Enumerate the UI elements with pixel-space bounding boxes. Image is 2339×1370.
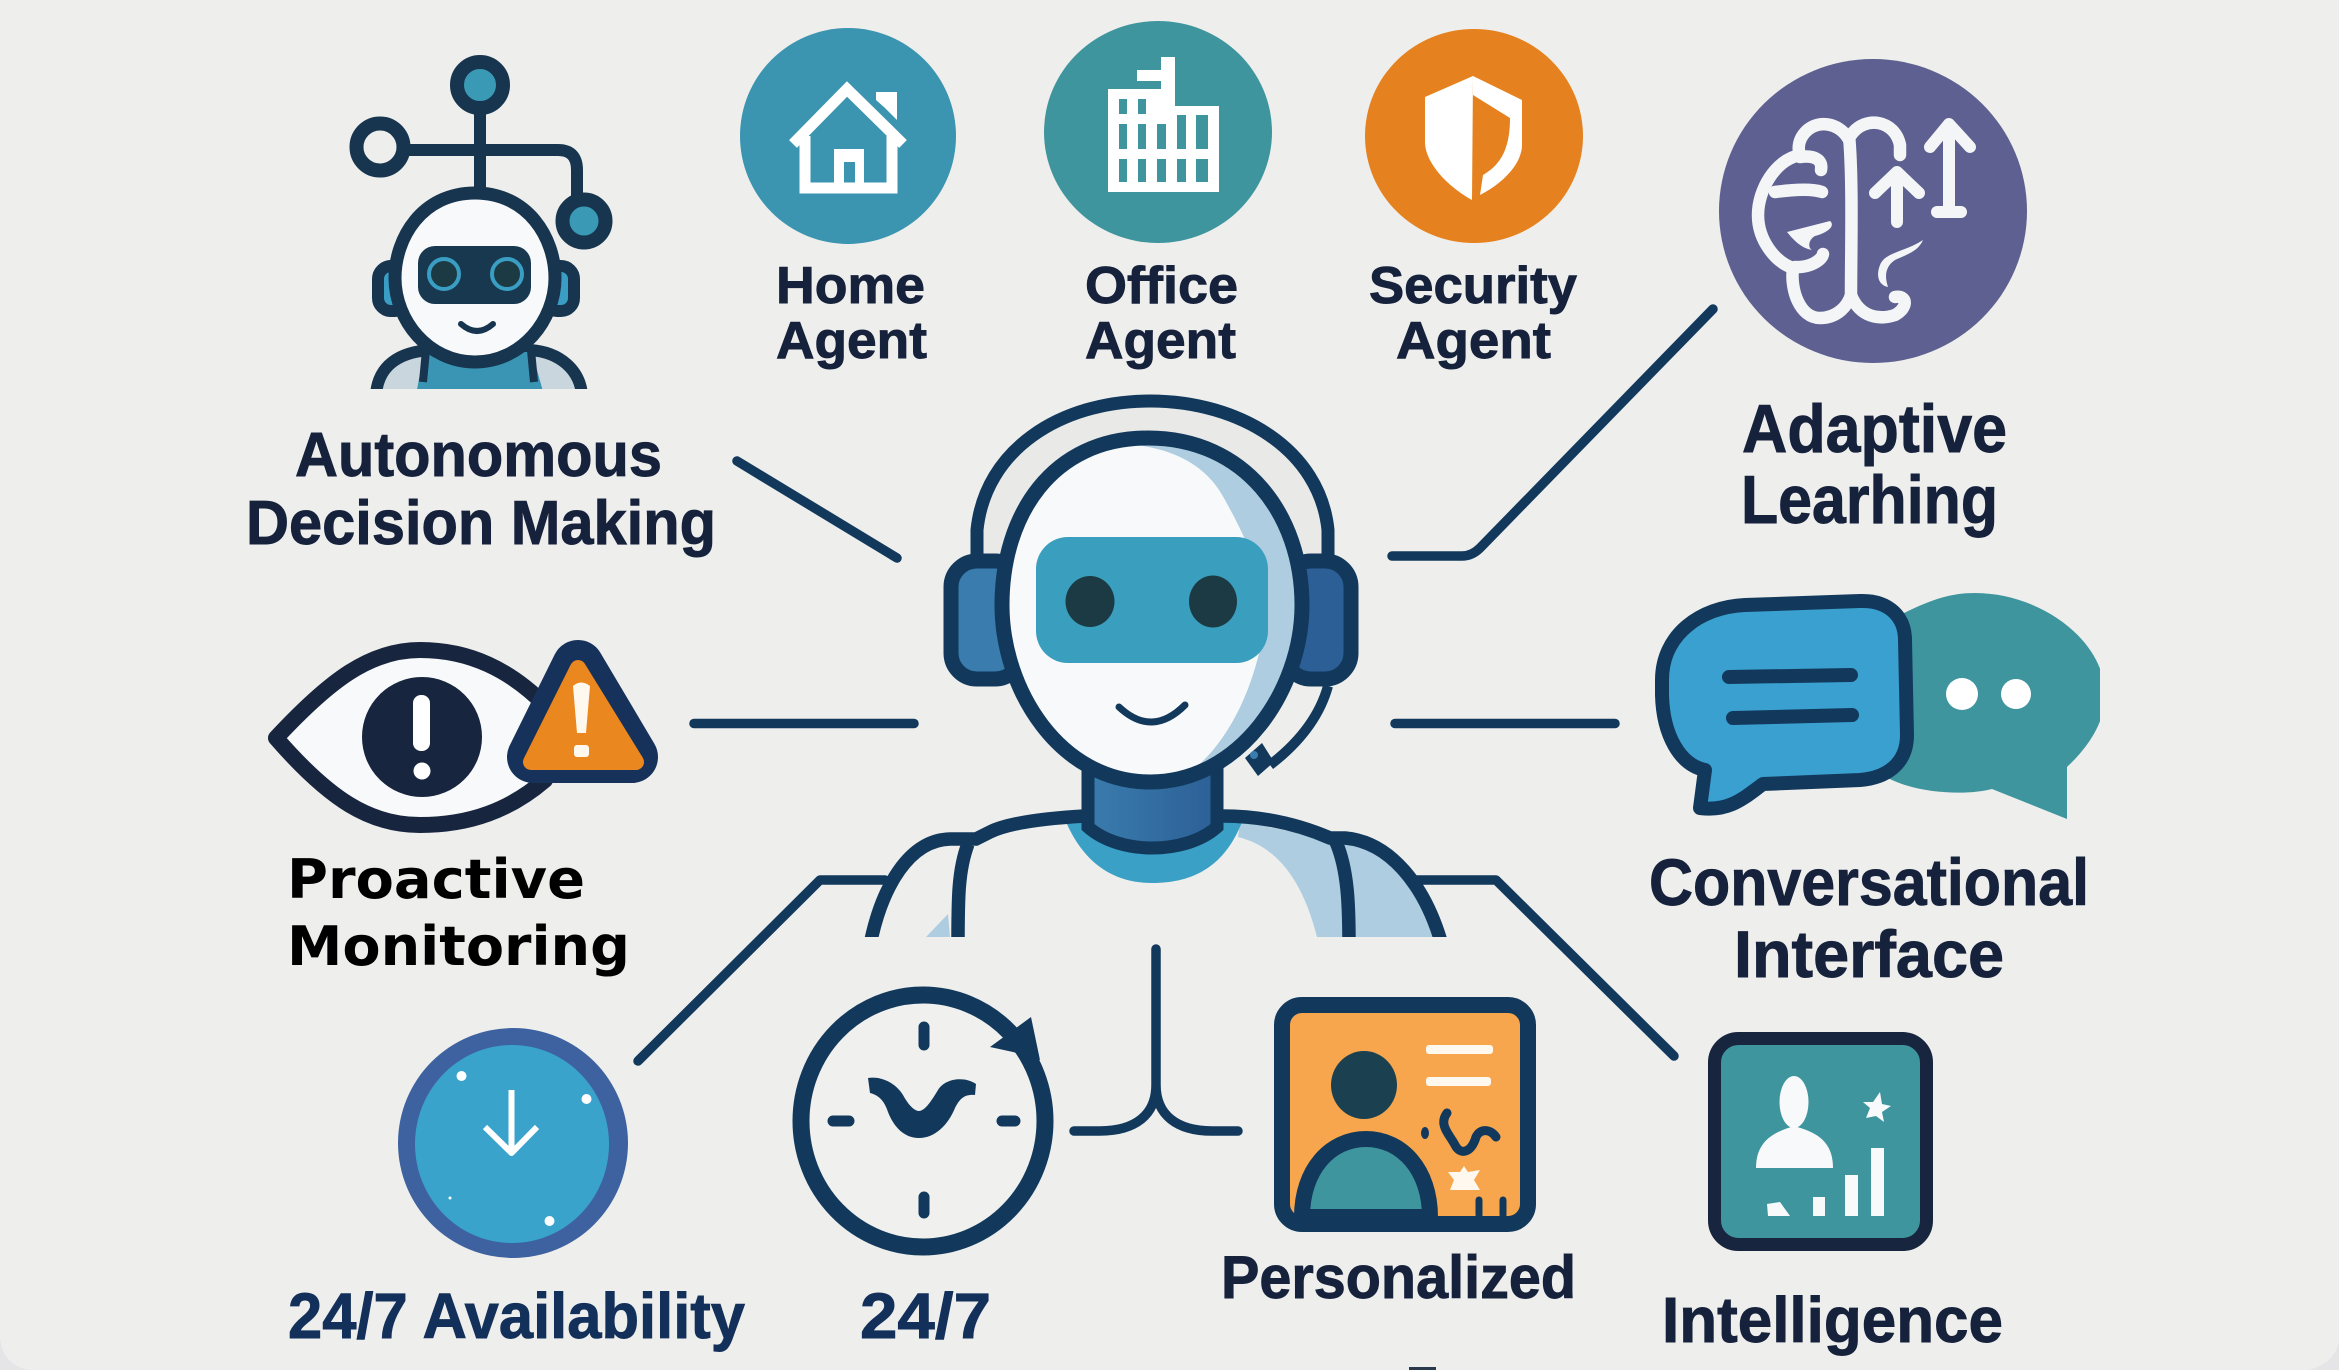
label: Adaptive Learhing [1741,391,2007,538]
icon: 24/7 clock [801,995,1045,1247]
icon: adaptive learning brain [1719,59,2027,363]
label: Autonomous Decision Making: Decision Making [246,489,716,558]
small robot ears [378,266,574,311]
icon: conversational chat bubbles [1662,593,2105,819]
label: Autonomous Decision Making: Autonomous [295,421,662,490]
label: Security Agent [1369,257,1577,370]
small robot visor [418,246,531,304]
label: Intelligence: Intelligence [1662,1284,2003,1356]
label: 24/7: 24/7 [860,1280,991,1352]
label: Proactive Monitoring: Proactive [287,848,585,911]
icon: intelligence card [1714,1038,1926,1244]
label: Proactive Monitoring: Monitoring [287,915,630,978]
icon: autonomous decision robot [356,62,606,395]
label: Conversational Interface [1649,845,2089,991]
ear cup left [951,561,1021,679]
label: Security Agent: Agent [1396,312,1551,370]
label: 24/7 Availability: 24/7 Availability [288,1280,745,1352]
label: Personalized: Personalized [1221,1244,1576,1311]
growth arrows [1875,124,1970,222]
circuit nodes [356,62,606,242]
label: Security Agent: Security [1369,257,1577,315]
label: Conversational Interface: Conversational [1649,845,2089,919]
circuit lines [380,85,577,221]
icon: personalized profile card [1282,1005,1528,1224]
label: Home Agent: Agent [776,312,927,370]
icon: home agent [740,28,956,244]
label: Proactive Monitoring [287,848,630,978]
microphone arm [1245,686,1328,776]
label: Conversational Interface: Interface [1734,917,2004,991]
label: Office Agent: Office [1085,257,1238,315]
small robot body [376,350,582,395]
robot neck [1088,760,1217,848]
icon: availability circle [398,1028,628,1258]
robot visor [1036,537,1268,663]
ear cup right [1285,561,1351,679]
headband [977,401,1328,565]
icon: office agent [1044,21,1272,243]
label: Home Agent: Home [776,257,925,315]
label: Autonomous Decision Making [246,421,716,558]
robot head [1002,438,1320,790]
central robot with headset [870,401,1442,945]
brain outline [1758,123,1905,318]
robot smile [1119,705,1185,722]
small robot head [395,193,555,362]
label: Adaptive Learhing: Learhing [1741,462,1998,538]
label: Home Agent [776,257,927,370]
label: Office Agent [1085,257,1238,370]
icon: security agent [1365,29,1583,243]
label: Adaptive Learhing: Adaptive [1742,391,2007,467]
icon: proactive monitoring eye with warning [276,650,636,825]
connector lines [638,309,1713,1131]
robot body and shoulders [870,816,1442,945]
robot eyes [1066,576,1237,628]
label: Office Agent: Agent [1085,312,1236,370]
small robot smile [461,324,493,331]
